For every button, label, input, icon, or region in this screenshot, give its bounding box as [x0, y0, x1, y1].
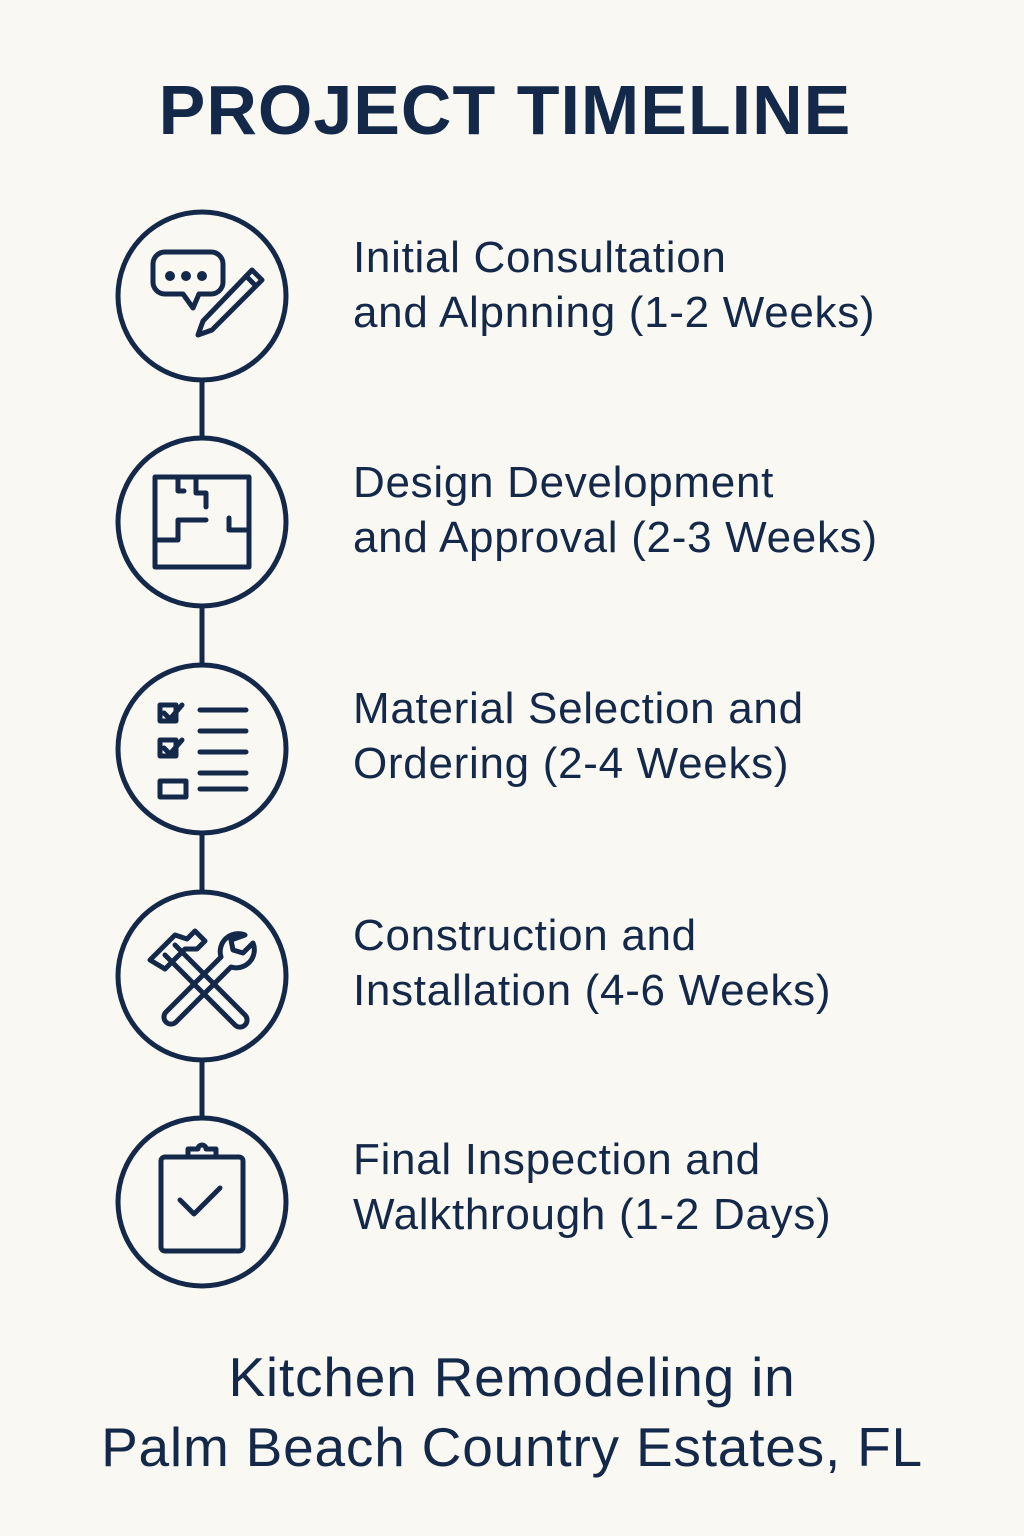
step 1 text: Initial Consultation — [353, 233, 727, 282]
step 3 text — [353, 684, 804, 788]
step 3 text: Ordering (2-4 Weeks) — [353, 739, 789, 788]
step 4 text: Construction and — [353, 911, 697, 960]
icon: checklist — [118, 665, 286, 833]
step 5 text: Final Inspection and — [353, 1135, 761, 1184]
step 1 text: and Alpnning (1-2 Weeks) — [353, 288, 875, 337]
icon: floor plan — [118, 438, 286, 606]
title: PROJECT TIMELINE — [159, 71, 851, 149]
step 4 text: Installation (4-6 Weeks) — [353, 966, 831, 1015]
step 5 text — [353, 1135, 831, 1239]
step 3 text: Material Selection and — [353, 684, 804, 733]
step 1 text — [353, 233, 875, 337]
step 2 text: and Approval (2-3 Weeks) — [353, 513, 878, 562]
icon: tools — [118, 892, 286, 1060]
step 4 text — [353, 911, 831, 1015]
step 5 text: Walkthrough (1-2 Days) — [353, 1190, 831, 1239]
footer subtitle: Palm Beach Country Estates, FL — [101, 1416, 923, 1478]
footer subtitle — [101, 1346, 923, 1478]
icon: consultation — [118, 212, 286, 380]
footer subtitle: Kitchen Remodeling in — [228, 1346, 796, 1408]
icon: clipboard — [118, 1118, 286, 1286]
step 2 text: Design Development — [353, 458, 774, 507]
step 2 text — [353, 458, 878, 562]
